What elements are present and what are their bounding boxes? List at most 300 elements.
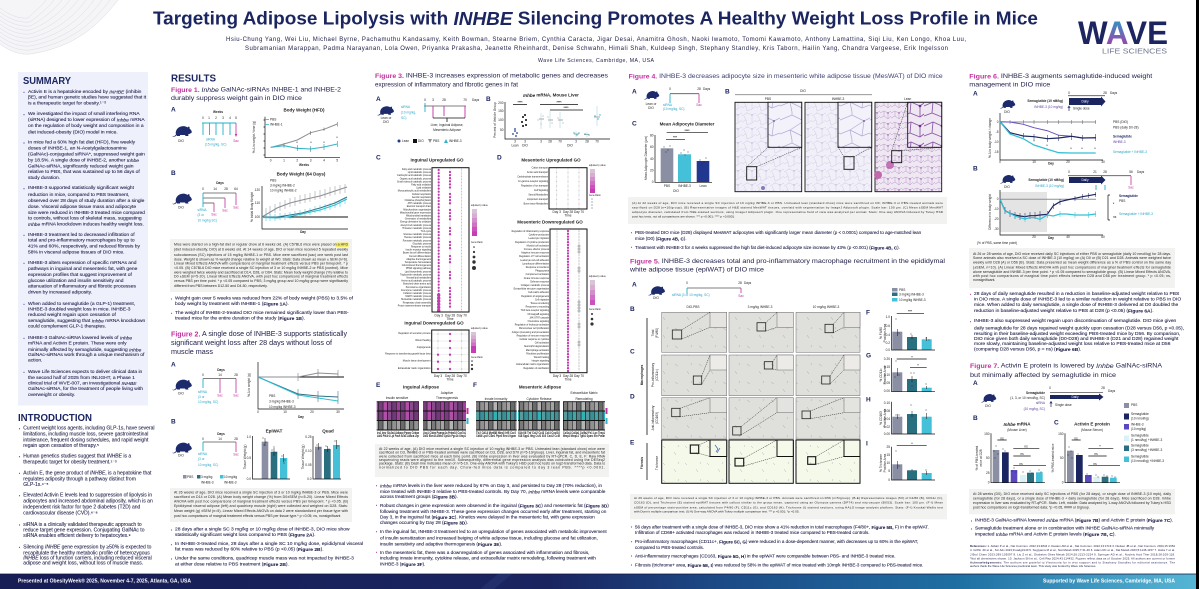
summary text: Activin E is a hepatokine encoded by INHBE (inhibin	[28, 89, 142, 95]
chart: Inhbe mRNA mouse liver: 150	[498, 109, 504, 113]
legend 6A: Semaglutide	[1113, 134, 1132, 138]
chart: Inhbe mRNA mouse liver: Percent of Vehicle Group	[493, 102, 497, 138]
panel: figure 1	[170, 86, 354, 322]
caption 7	[969, 489, 1175, 514]
dot plot: inguinal upregulated GO: PPAR signaling pathway	[406, 267, 432, 270]
panel: figure 1: A	[171, 106, 176, 114]
summary text: INHBE-3 supported statistically significant weight	[28, 185, 135, 191]
figure 2 findings: Under the same conditions, quadricep muscle mass was not impacted by INHBE-3	[175, 556, 354, 562]
panel: figure 7	[969, 362, 1175, 538]
summary text: total and pro-inflammatory macrophages by up to	[28, 238, 135, 244]
bar chart: CD163	[879, 401, 935, 436]
line chart: body weight HFD: *	[323, 141, 325, 145]
panel: figure 3: F	[473, 382, 477, 389]
timeline 2A: 14	[218, 373, 222, 377]
introduction text: siRNA is a clinically validated therapeutic approach to	[23, 522, 142, 528]
bar chart: mean adipocyte diameter: DIO	[673, 189, 679, 193]
timeline 2B: (3 or	[198, 457, 205, 461]
dot plot: mesenteric downregulated GO: Time	[565, 378, 572, 382]
timeline 2A: Sac	[217, 394, 223, 398]
timeline 7A: Semaglutide	[1026, 391, 1045, 395]
panel: figure 5: H	[866, 396, 871, 404]
legend and bracket 6B: Semaglutide + INHBE-3	[1119, 212, 1153, 216]
line chart: body weight 64 days: PBS	[270, 178, 276, 182]
heading: results: RESULTS	[171, 74, 216, 84]
figure 6 title	[969, 73, 1153, 88]
timeline 6B	[1028, 170, 1145, 190]
dot plot: mesenteric downregulated GO: TGF beta receptor signaling	[521, 309, 550, 312]
timeline 1B: 14	[213, 187, 217, 191]
bar chart: mean adipocyte diameter: 40	[650, 157, 654, 161]
figure 1 findings: The weight of INHBE-2-treated DIO mice remained significantly lower than PBS-	[175, 310, 349, 316]
dot plot: mesenteric downregulated GO: Leukocyte migration	[528, 237, 550, 240]
chart: Inhbe mRNA mouse liver: 3	[514, 140, 516, 144]
timeline 1A: 1	[208, 116, 210, 120]
dot plot: inguinal upregulated GO: Glycolytic process	[412, 242, 432, 245]
heading: introduction: INTRODUCTION	[18, 413, 92, 424]
dot plot: inguinal upregulated GO: Respiratory chain assembly	[403, 301, 432, 304]
timeline 7A: Single dose	[1055, 403, 1072, 407]
heatmaps: mesenteric adipose: Remodeling	[575, 397, 593, 401]
figure 3 title: Figure 3. INHBE-3 increases expression of metabolic genes and decreases	[375, 72, 608, 80]
adipose micrographs: DIO	[800, 89, 806, 93]
timeline 2B: Sac	[233, 452, 239, 456]
legend: padj color and gene ratio	[471, 204, 488, 270]
dot plot: inguinal upregulated GO: Amino acid catabolic process	[401, 280, 432, 283]
panel: figure 3: Lean or	[381, 116, 392, 120]
dot plot: mesenteric downregulated GO: Mononuclear cell proliferation	[519, 327, 550, 330]
summary text: GalNAc-siRNA, for the treatment of people living with	[28, 386, 143, 392]
timeline 4A: siRNA	[663, 103, 673, 107]
panel: figure 1: DIO	[178, 206, 184, 210]
heatmaps: inguinal adipose: Irs1 Insr Slc2a4 Adipoq Pparg Cebpa	[377, 431, 419, 435]
icon: mouse	[377, 106, 394, 115]
dot plot: mesenteric downregulated GO: Fibroblast proliferation	[526, 352, 550, 355]
timeline 4A: Days	[703, 87, 711, 91]
micrograph grid: 3 mg/kg INHBE-3	[748, 305, 773, 309]
figure 3 findings: In the mesenteric fat, there was a downregulation of genes associated with inflammation and fibrosis,	[380, 550, 590, 555]
summary text: βE), and human genetic studies have suggested that it	[28, 94, 147, 100]
introduction text: Human genetics studies suggest that INHBE is a	[23, 454, 131, 460]
dot plot: inguinal upregulated GO: Small molecule catabolic process	[397, 180, 432, 183]
caption 7: expression in liver was evaluated by RT-qPCR. Stats: Left, middle: Data analyzed by 1-way ANOVA followed by Tukey's HSD	[973, 501, 1171, 505]
figure 2 findings: fat mass was reduced by 60% relative to PBS (p <0.05) (Figure 2B).	[175, 546, 324, 552]
panel: figure 7: C	[1054, 420, 1059, 426]
line chart: body weight 64 days: Body Weight (64 Days)	[277, 172, 326, 176]
micrograph grid: Fibrosis	[640, 457, 644, 469]
dot plot: mesenteric downregulated GO: Tissue remodeling	[530, 302, 550, 305]
figure 6 findings: DIO mice given both daily semaglutide (D0-D28) and INHBE-3 (D21 and D28) regained weight	[974, 336, 1179, 342]
timeline 2A: 0	[202, 373, 204, 377]
summary text: could complement GLP-1 therapies.	[28, 324, 106, 330]
dot plot: inguinal upregulated GO: Peroxisome organization	[406, 286, 432, 289]
bar chart: EpiWAT: 1.0	[247, 435, 251, 439]
bar chart: F4/80: Positive Area	[883, 323, 887, 342]
timeline 7A: (10 mg/kg, SC)	[1024, 407, 1045, 411]
bar chart: mean adipocyte diameter: 60	[650, 145, 654, 149]
summary text: overweight or obesity.	[28, 392, 75, 398]
figure 5 findings	[632, 524, 929, 568]
timeline 2A: Days	[217, 368, 225, 372]
timeline 1B: (3 or	[198, 213, 205, 217]
timeline 6B: Semaglutide (10 nM/kg)	[1028, 178, 1064, 182]
bar chart: mean adipocyte diameter: PBS	[664, 184, 670, 188]
summary text: relative to PBS, that was sustained up to 56 days of	[28, 169, 140, 175]
timeline 5A: 28	[738, 281, 742, 285]
bar chart: CD11c: 0.00	[884, 389, 890, 393]
bar chart: Activin E protein: 150	[1058, 432, 1064, 436]
dot plot: inguinal downregulated GO: Inguinal Downregulated GO	[404, 320, 464, 326]
panel: figure 3: C	[376, 154, 381, 162]
dot plot: inguinal upregulated GO: Time	[447, 317, 454, 321]
panel: figure 2: DIO	[178, 392, 184, 396]
micrograph grid: Anti-inflammatory	[651, 405, 655, 430]
dot plot: mesenteric downregulated GO: Regulation of immune response	[517, 334, 550, 337]
timeline 6A: Single dose	[1073, 106, 1090, 110]
legend 7: (10 nmol/kg) +INHBE-3	[1131, 459, 1164, 463]
introduction text: adipose and weight loss, without loss of muscle mass.	[23, 561, 143, 567]
panel: figure 6: DIO	[1004, 185, 1010, 189]
timeline 4A	[663, 87, 711, 111]
panel: figure 1: DIO	[178, 139, 184, 143]
timeline 6A: INHBE-3 (10 mg/kg)	[1034, 105, 1063, 109]
timeline 1A: 0	[202, 116, 204, 120]
bar chart: CD163: 0.02	[884, 425, 890, 429]
bar chart: Quad: 0.05	[305, 463, 312, 467]
figure 2 findings: statistically significant weight loss compared to PBS (Figure 2A).	[175, 532, 316, 538]
chart: Inhbe mRNA mouse liver: 3	[540, 140, 542, 144]
panel: figure 4: Lean or	[646, 102, 657, 106]
dot plot: mesenteric upregulated GO: Mesenteric Upregulated GO	[521, 158, 581, 162]
line chart: weight change 6A: -15	[994, 150, 999, 154]
caption 3: were collected from sacrificed mice at each time point. (B) Inhbe expression in liver was evaluated by RT-qPCR. C, D, E, F: Raw RNA	[379, 454, 606, 458]
line chart: weight change 28 days: 10 mg/kg INHBE-3	[269, 405, 296, 409]
legend 7: (3 nmol/kg) +INHBE-3	[1131, 448, 1162, 452]
heatmaps: inguinal adipose: Inguinal Adipose	[403, 384, 440, 390]
timeline 1B: 64	[234, 187, 238, 191]
panel: figure 4: DIO	[648, 106, 654, 110]
summary text: GalNAc-siRNA, significantly reduced weight gain	[28, 164, 134, 170]
summary text: Inhbe mRNA knockdown induces healthy weight loss.	[28, 222, 144, 228]
figure 2 title	[171, 331, 348, 356]
bar chart: Quad: Tissue Weight (g)	[301, 445, 305, 469]
summary text: minimally affected by semaglutide, suggesting Inhbe	[28, 347, 142, 353]
bar chart: F4/80: 1.0	[886, 315, 890, 319]
dot plot: mesenteric downregulated GO	[512, 220, 606, 382]
line chart: weight change 28 days: % Δ in weight (g)	[247, 373, 251, 397]
legend 7: (10 mg/kg)	[1131, 427, 1146, 431]
figure 2 title: significant weight loss after 28 days without loss of	[171, 340, 332, 347]
heatmaps: mesenteric adipose: Tlr2 Cd14 Myd88 Nlrp3 Irf5 Ccr2	[476, 431, 516, 435]
timeline 1A: 5	[235, 116, 237, 120]
introduction text: cardiovascular disease (CVD).⁶⁻⁸	[23, 510, 98, 516]
timeline 1A: 2	[215, 116, 217, 120]
caption 3: At 22 weeks of age, (A) DIO mice received a single SC injection of 10 mg/kg INHBE-3 or PBS. Untreated lean (standard chow) mice were	[379, 447, 605, 451]
dot plot: mesenteric downregulated GO: Regulation of cytokine production	[515, 241, 550, 244]
dot plot: mesenteric upregulated GO: Lipoprotein transport	[527, 198, 548, 201]
timeline 6B: 56	[1129, 170, 1133, 174]
dot plot: mesenteric downregulated GO: Regulation of leukocyte activation	[515, 324, 550, 327]
figure 2 title: muscle mass	[171, 349, 214, 356]
figure 4 findings: PBS-treated DIO mice (D28) displayed MesWAT adipocytes with significantly larger mean diameter (p < 0.0001) compared to age-matched lean	[635, 230, 922, 235]
panel: figure 2: A	[171, 362, 176, 368]
caption 4: post hoc tests, not all comparisons are shown. *** p <0.001; **** p <0.0001.	[632, 215, 735, 219]
figure 1 title	[171, 86, 341, 102]
figure 4 findings	[632, 230, 922, 250]
caption 6: with post hoc comparisons of marginal time point effects between D28 and D56 per treatment group. * p <0.05; ns,	[973, 274, 1171, 278]
caption 1: (diet induced-obesity, DIO) at 6 weeks old. At 14 weeks of age, DIO or lean mice received 5 repeated weekly	[174, 248, 348, 252]
timeline 1B: Sac	[211, 212, 217, 216]
heatmaps: inguinal adipose: Thermogenesis	[436, 396, 458, 400]
line chart: weight difference 6B: -20	[994, 217, 999, 221]
timeline 7A: Days	[1108, 389, 1116, 393]
figure 1 findings: body weight by treatment with INHBE-1 (Figure 1A).	[175, 301, 289, 307]
bar chart: EpiWAT	[243, 428, 290, 481]
summary text: size were reduced in INHBE-3 treated mice compared	[28, 210, 145, 216]
summary text: Wave Life Sciences expects to deliver clinical data in	[28, 369, 143, 375]
dot plot: inguinal upregulated GO: Fatty acid metabolic process	[402, 168, 432, 171]
caption 5: At 26 weeks of age, DIO mice received a single SC injection of 3 or 10 mg/kg INHBE-3 or PBS. Animals were sacrificed on D56 (n=5/group). (B-E) Representative images (5X) of F4/80 (B), CD11c (C),	[634, 496, 943, 500]
line chart: body weight HFD: *	[310, 141, 312, 145]
timeline 2B: 10 mg/kg, SC)	[198, 463, 218, 467]
timeline 2A: Sac	[233, 394, 239, 398]
line chart: weight change 28 days: 0	[257, 410, 259, 414]
legend 6A: Semaglutide + INHBE-3	[1113, 150, 1147, 154]
figure 5 findings: Fibrosis (trichrome+ area, Figure 5E, I) was reduced by 58% in the epiWAT of mice treated with 10mpk INHBE-3 compared to PBS-treated mice.	[635, 562, 923, 568]
figure 1 title: Figure 1. Inhbe GalNAc-siRNAs INHBE-1 and INHBE-2	[171, 86, 341, 94]
dot plot: mesenteric downregulated GO: Defense response	[530, 280, 550, 283]
line chart: body weight 64 days: 3 mg/kg INHBE-2	[270, 184, 295, 188]
figure 6 findings: 28 days of daily semaglutide resulted in a reduction in baseline-adjusted weight relative to PBS	[974, 291, 1180, 297]
line chart: weight change 6A: *	[1033, 140, 1035, 144]
summary text: When added to semaglutide (a GLP-1) treatment,	[28, 301, 135, 307]
line chart: body weight HFD: Body Weight (HFD)	[284, 108, 325, 112]
caption 7: semaglutide (for 28 days), or a single dose of INHBE-3 + daily semaglutide (for 28 days). Mice sacrificed on D28. Inhbe	[973, 496, 1171, 500]
bar chart: Inhbe mRNA: ns	[1019, 462, 1023, 466]
figure 3 findings: including innate immunity, cytokine release, and extracellular matrix remodeling, following treatment with	[380, 556, 596, 560]
line chart: body weight HFD: *	[336, 136, 338, 140]
dot plot: inguinal downregulated GO: Muscle tissue development	[403, 360, 431, 363]
legend 5	[892, 288, 926, 302]
legend 5: 3 mg/kg INHBE-3	[899, 292, 924, 296]
dot plot: mesenteric downregulated GO: Macrophage activation	[526, 349, 550, 352]
timeline 1A: 3	[222, 116, 224, 120]
dot plot: mesenteric downregulated GO: Adaptive immune response	[521, 252, 550, 255]
authors: Wave Life Sciences, Cambridge, MA, USA	[538, 58, 655, 64]
dot plot: mesenteric downregulated GO: Phagocytosis	[535, 270, 550, 273]
figure 7 title: Figure 7. Activin E protein is lowered by Inhbe GalNAc-siRNA	[970, 362, 1163, 370]
summary text: (siRNA) designed to lower expression of Inhbe mRNA	[28, 117, 145, 123]
bar chart: trichrome: Positive Area	[883, 453, 887, 472]
legend 3A: DIO	[418, 139, 424, 143]
micrograph grid: E	[630, 440, 635, 446]
line chart: body weight HFD: 2	[296, 158, 298, 162]
line chart: body weight 64 days: % Initial Body Weight	[250, 192, 254, 222]
introduction text: Activin E, the gene product of INHBE, is a hepatokine that	[23, 470, 152, 476]
bar chart: trichrome: 5	[888, 469, 890, 473]
adipose micrographs: INHBE-3	[832, 97, 845, 101]
timeline 1B: 28	[224, 187, 228, 191]
bar chart: CD11c: Positive Area	[883, 365, 887, 384]
legend 3A: PBS	[433, 139, 439, 143]
timeline 5A	[672, 281, 752, 298]
timeline 7A: Daily	[1071, 395, 1079, 399]
legend and bracket 6B: PBS	[1119, 199, 1125, 203]
introduction text: regulates adiposity through a pathway distinct from	[23, 476, 136, 482]
dot plot: inguinal upregulated GO: Aerobic respiration	[412, 196, 432, 199]
legend 7: Semaglutide	[1131, 412, 1149, 416]
line chart: weight change 6A: *	[1046, 144, 1048, 148]
bar chart: mean adipocyte diameter: Mean Adipocyte Diameter	[660, 122, 715, 126]
figure 4 findings: Treatment with INHBE-3 for 4 weeks suppressed the high fat diet-induced adipocyte size increase by 43% (p <0.001) (Figure 4B, C).	[635, 245, 900, 250]
legend 7: Semaglutide	[1131, 454, 1149, 458]
references: Acknowledgements: The authors are grateful to Vivotecnia for in vivo support and to Stephany Standley for editorial assistance. The	[970, 561, 1175, 565]
panel: figure 5: I	[866, 440, 868, 448]
legend and bracket 6B	[1108, 194, 1153, 220]
timeline 7A: 0	[1049, 386, 1051, 390]
timeline 7A: siRNA	[1036, 401, 1046, 405]
summary text: mRNA and Activin E protein. These were only	[28, 340, 127, 346]
introduction text: limitations, including muscle loss, severe gastrointestinal	[23, 431, 148, 437]
timeline 1A: 4	[229, 116, 231, 120]
bar chart: CD163: % CD163	[879, 411, 883, 425]
bar chart: mean adipocyte diameter: ****	[685, 129, 690, 133]
dot plot: inguinal upregulated GO: Day 3	[435, 314, 443, 318]
legend and bracket 6B: *	[1113, 202, 1115, 206]
panel: figure 7: B	[973, 415, 978, 422]
panel: figure 4	[628, 73, 947, 250]
timeline 3A: 0	[424, 98, 426, 102]
caption 5: with Dunn's multiple comparison test; (I) H) One-way ANOVA with Tukey multiple comparison test. *** p <0.001; *p <0.05.	[634, 510, 800, 514]
caption 3: normalized to DIO PBS for each day. Chow-fed mice data is compared to day 3 lean PBS. ****p <0.0001.	[379, 465, 605, 469]
panel: figure 3	[375, 72, 610, 566]
panel: figure 1: B	[171, 170, 176, 177]
caption 5: CD163 (D), and Trichrome (E) stained epiWAT tissues with callout similar to the group mean, captured using an Olympus camera (DP74) and microscope (BX53). Scale bar: 100 µm. (F-I) Mean	[634, 500, 943, 504]
dot plot: mesenteric upregulated GO	[517, 158, 606, 218]
figure 3 title: expression of inflammatory and fibrotic genes in fat	[375, 82, 518, 88]
legend 2B	[183, 475, 237, 484]
caption 6	[969, 248, 1175, 288]
bar chart: mean adipocyte diameter: Mean Adipocyte Diameter (µm)	[644, 136, 648, 180]
micrograph grid: Macrophages	[640, 365, 644, 385]
dot plot: inguinal upregulated GO: Glucose metabolic process	[403, 233, 432, 236]
line chart: body weight HFD: PBS	[270, 118, 276, 122]
dot plot: mesenteric downregulated GO: Day 70	[574, 374, 584, 378]
dot plot: mesenteric downregulated GO: Day 3	[553, 374, 561, 378]
figure 3 findings: Day 3, in the inguinal fat (Figure 3C). Kinetics were delayed in the mesenteric fat, with gene expression	[380, 514, 595, 520]
dot plot: inguinal downregulated GO: adjusted p value	[471, 327, 488, 330]
timeline 7A: (1, 3, or 10 nmol/kg, SC)	[1010, 396, 1045, 400]
summary text: We investigated the impact of small interfering RNA	[28, 111, 140, 117]
bar chart: mean adipocyte diameter: Lean	[699, 184, 707, 188]
panel: figure 2: DIO	[178, 454, 184, 458]
legend 6A: PBS (daily D0-28)	[1113, 126, 1139, 130]
panel: figure 5	[629, 258, 947, 568]
figure 6 findings	[970, 291, 1184, 352]
dot plot: mesenteric downregulated GO: Regulation of ossification	[523, 367, 550, 370]
micrograph grid: Total	[651, 329, 655, 336]
panel: figure 4: C	[632, 120, 637, 128]
summary text: glucose utilization and insulin sensitivity and	[28, 278, 124, 284]
timeline 6B: 0	[1068, 170, 1070, 174]
panel: figure 5: DIO	[653, 296, 659, 300]
panel: figure 3: B	[486, 96, 491, 103]
dot plot: inguinal upregulated GO: Insulin receptor signaling	[406, 249, 432, 252]
summary text: expression profiles that suggest improvement of	[28, 272, 132, 278]
summary text: pathways in inguinal and mesenteric fat, with gene	[28, 266, 138, 272]
panel: figure 6: B	[973, 166, 978, 172]
chart: Inhbe mRNA mouse liver: ****	[518, 100, 523, 104]
line chart: weight difference 6B: Difference in body weight	[988, 194, 992, 230]
figure 1 findings	[172, 296, 354, 322]
caption 6: At 26 or 28 weeks of age, DIO mice received daily SC injections of either PBS or semaglutide (daily 10 nmol/kg) for 28 days.	[973, 252, 1171, 256]
caption 2: post hoc comparisons of marginal treatment effects versus PBS per tissue type.* p <0.05; ns, nonsignificant	[174, 514, 340, 518]
summary text: action.	[28, 358, 42, 364]
bar chart: Activin E protein: 50	[1060, 456, 1064, 460]
dot plot: inguinal upregulated GO: Day 28	[445, 314, 455, 318]
dot plot: mesenteric downregulated GO: Immune effector process	[524, 248, 550, 251]
figure 5 title: white adipose tissue (epiWAT) of DIO mice	[629, 266, 765, 274]
figure 2 findings: 28 days after a single SC 3 mg/kg or 10 mg/kg dose of INHBE-3, DIO mice show	[175, 526, 350, 532]
micrograph grid: C	[630, 348, 635, 356]
bar chart: Inhbe mRNA: 50	[986, 456, 990, 460]
icon: mouse	[172, 443, 192, 453]
bar chart: CD163: 0.00	[884, 432, 890, 436]
chart: Inhbe mRNA mouse liver: 100	[498, 118, 504, 122]
dot plot: mesenteric downregulated GO: Lymphocyte differentiation	[522, 262, 550, 265]
timeline 4A: (10 mg/kg, SC)	[663, 107, 684, 111]
bar chart: Inhbe mRNA: 0	[988, 480, 990, 484]
figure 6 title: management in DIO mice	[969, 82, 1051, 88]
line chart: body weight HFD: % Δ in weight / time (g)	[252, 121, 256, 153]
dot plot: mesenteric downregulated GO: Neutrophil degranulation	[524, 345, 550, 348]
caption 4: (A) At 22 weeks of age, DIO mice received a single SC injection of 10 mg/kg INHBE-3 or PBS. Untreated lean (standard chow) mice were sacrificed on D0; INHBE-3 or PBS-treated animals were	[632, 201, 943, 205]
caption 4: adipocyte diameter, calculated from H&E-stained sections, using ImageJ Adiposoft plugin. One representative field of view was analyzed per animal. Stats: One-way ANOVA followed by Tukey HSD	[632, 210, 944, 214]
timeline 5A: Sac	[738, 294, 744, 298]
bar chart: Inhbe mRNA: 25	[986, 471, 990, 475]
heatmaps: inguinal adipose: Dio2 Elovl3 Adrb3 Cpt1b Pgc1b Otop1	[423, 434, 466, 438]
heatmaps: inguinal adipose: Akt2 Pik3r1 Lpl Fasn Scd1 Acaca Lep	[377, 434, 419, 438]
dot plot: inguinal upregulated GO: NADH metabolic process	[405, 295, 432, 298]
micrograph grid: 10 mg/kg INHBE-3	[813, 305, 840, 309]
chart: Inhbe mRNA mouse liver: 50	[500, 128, 504, 132]
timeline 6B: Days	[1137, 170, 1145, 174]
caption 2: ANOVA with post hoc comparisons of marginal treatment effects versus PBS per timepoint. * p <0.05. (B)	[174, 500, 348, 504]
summary text: doses of INHBE-1, an N-Acetylgalactosamine	[28, 146, 127, 152]
timeline 3A: Mesenteric Adipose	[433, 128, 461, 132]
dot plot: mesenteric downregulated GO: NF-kappaB signaling	[528, 314, 550, 316]
bar chart: Activin E protein: *	[1099, 444, 1101, 448]
micrograph grid: DIO-PBS	[686, 305, 700, 309]
summary text: the second half of 2025 from INLIGHT, a Phase 1	[28, 375, 135, 381]
caption 3: sacrificed on D3, INHBE-3 or PBS-treated animals were sacrificed on D3, D28, and D70 (n=5-10/group). Liver, inguinal fat, and mesenteric fat	[379, 451, 605, 455]
dot plot: mesenteric upregulated GO: Day 70	[574, 210, 584, 214]
figure 2 title: Figure 2. A single dose of INHBE-3 supports statistically	[171, 331, 348, 338]
figure 6 findings: more slowly, maintaining baseline-adjusted weight loss relative to PBS-treated mice at D56	[974, 341, 1171, 347]
bar chart: CD11c: 0.20	[884, 357, 890, 361]
image: PBS	[735, 102, 802, 192]
line chart: body weight 64 days: 120	[255, 188, 260, 192]
introduction text: reduce target gene expression. Conjugating GalNAc to	[23, 528, 145, 534]
panel: figure 3: E	[376, 382, 381, 389]
dot plot: mesenteric upregulated GO: Amino acid transport	[527, 171, 548, 174]
micrograph grid: B	[630, 306, 635, 313]
summary text: driven by increased adiposity.	[28, 290, 92, 296]
legend 3A: INHBE-3	[449, 139, 462, 143]
dot plot: mesenteric downregulated GO: Response to interferon	[526, 266, 550, 269]
summary text: INHBE-3 alters expression of specific mRNAs and	[28, 260, 137, 266]
chart: Inhbe mRNA mouse liver: 28	[585, 140, 589, 144]
